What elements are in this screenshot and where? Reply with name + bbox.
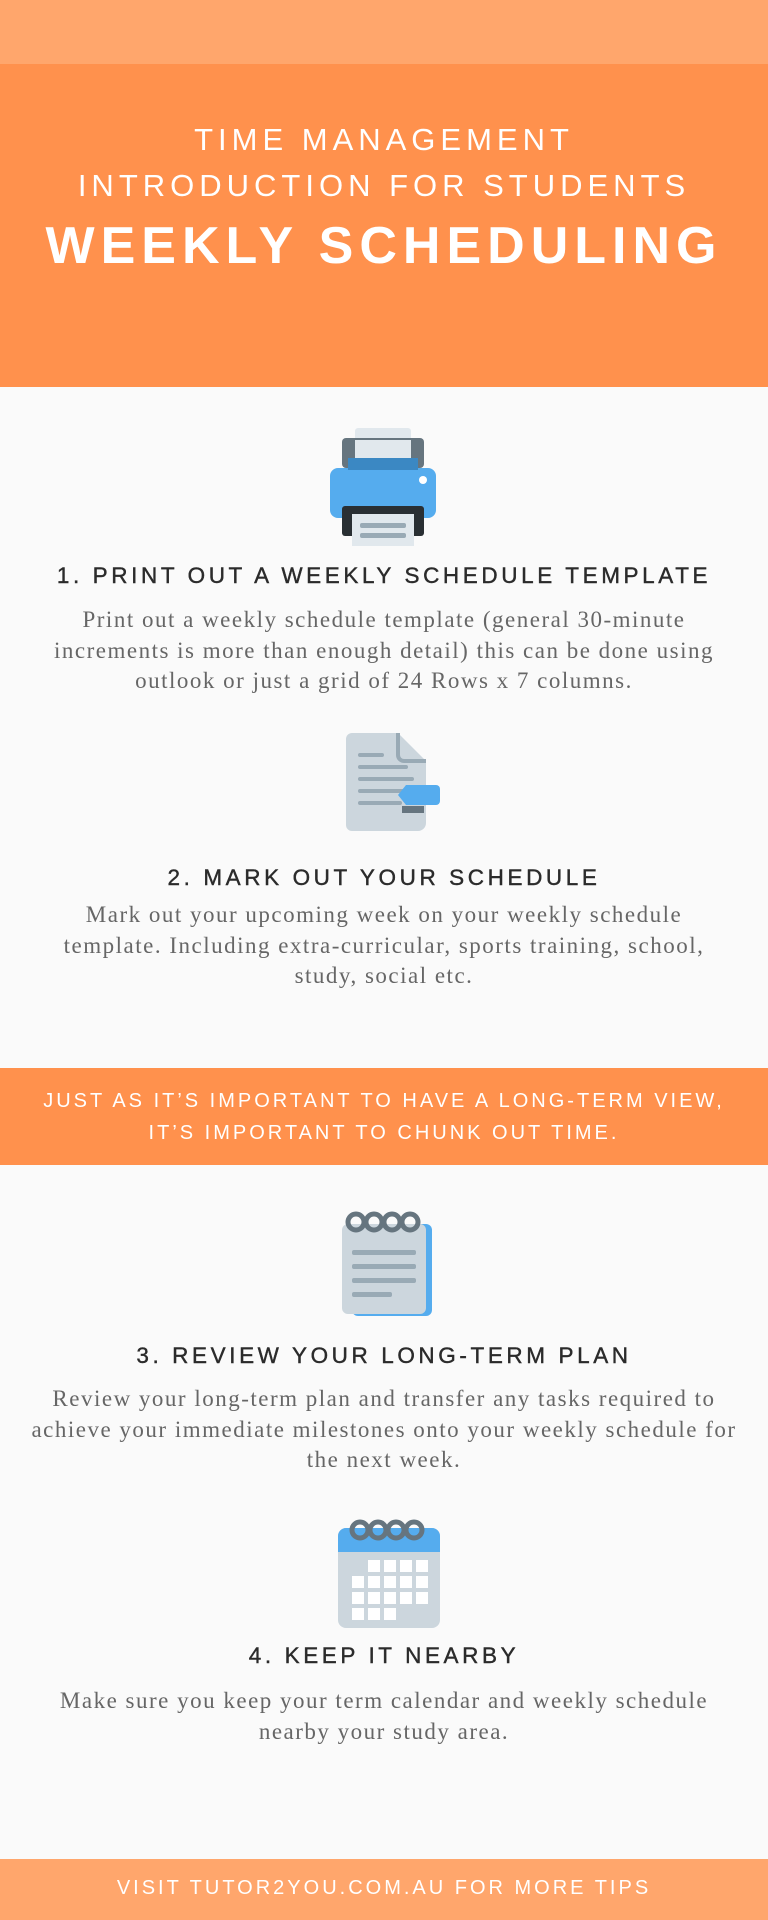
heading 2: 2. MARK OUT YOUR SCHEDULE bbox=[168, 865, 600, 890]
paragraph 3 bbox=[31, 1386, 737, 1472]
top band bbox=[0, 0, 768, 64]
paragraph 3: achieve your immediate milestones onto your weekly schedule for bbox=[31, 1416, 737, 1442]
header bbox=[0, 64, 768, 387]
footer bbox=[0, 1859, 768, 1920]
heading 4: 4. KEEP IT NEARBY bbox=[249, 1643, 519, 1668]
paragraph 2 bbox=[64, 902, 704, 988]
band text: JUST AS IT’S IMPORTANT TO HAVE A LONG-TERM VIEW, bbox=[43, 1090, 725, 1112]
paragraph 3: the next week. bbox=[307, 1447, 461, 1472]
orange band bbox=[0, 1068, 768, 1165]
heading 3: 3. REVIEW YOUR LONG-TERM PLAN bbox=[136, 1343, 632, 1368]
paragraph 3: Review your long-term plan and transfer any tasks required to bbox=[52, 1386, 716, 1411]
paragraph 2: study, social etc. bbox=[295, 963, 473, 988]
icon: notebook bbox=[342, 1212, 432, 1316]
footer text: VISIT TUTOR2YOU.COM.AU FOR MORE TIPS bbox=[117, 1877, 651, 1899]
paragraph 2: template. Including extra-curricular, sports training, school, bbox=[64, 932, 704, 958]
icon: document bbox=[346, 733, 440, 831]
paragraph 1 bbox=[54, 607, 714, 693]
main title: WEEKLY SCHEDULING bbox=[46, 217, 722, 275]
paragraph 4: Make sure you keep your term calendar and weekly schedule bbox=[60, 1688, 708, 1713]
paragraph 1: increments is more than enough detail) this can be done using bbox=[54, 638, 714, 662]
band text bbox=[43, 1090, 725, 1144]
paragraph 2: Mark out your upcoming week on your weekly schedule bbox=[86, 902, 682, 927]
paragraph 1: outlook or just a grid of 24 Rows x 7 columns. bbox=[135, 668, 633, 693]
heading 1: 1. PRINT OUT A WEEKLY SCHEDULE TEMPLATE bbox=[57, 563, 711, 588]
paragraph 1: Print out a weekly schedule template (general 30-minute bbox=[82, 607, 686, 632]
subtitle bbox=[78, 122, 690, 203]
icon: calendar bbox=[338, 1520, 440, 1628]
band text: IT’S IMPORTANT TO CHUNK OUT TIME. bbox=[149, 1122, 619, 1144]
subtitle: TIME MANAGEMENT bbox=[194, 122, 574, 157]
icon: printer bbox=[330, 428, 436, 546]
subtitle: INTRODUCTION FOR STUDENTS bbox=[78, 168, 690, 203]
paragraph 4: nearby your study area. bbox=[259, 1718, 509, 1744]
paragraph 4 bbox=[60, 1688, 708, 1744]
